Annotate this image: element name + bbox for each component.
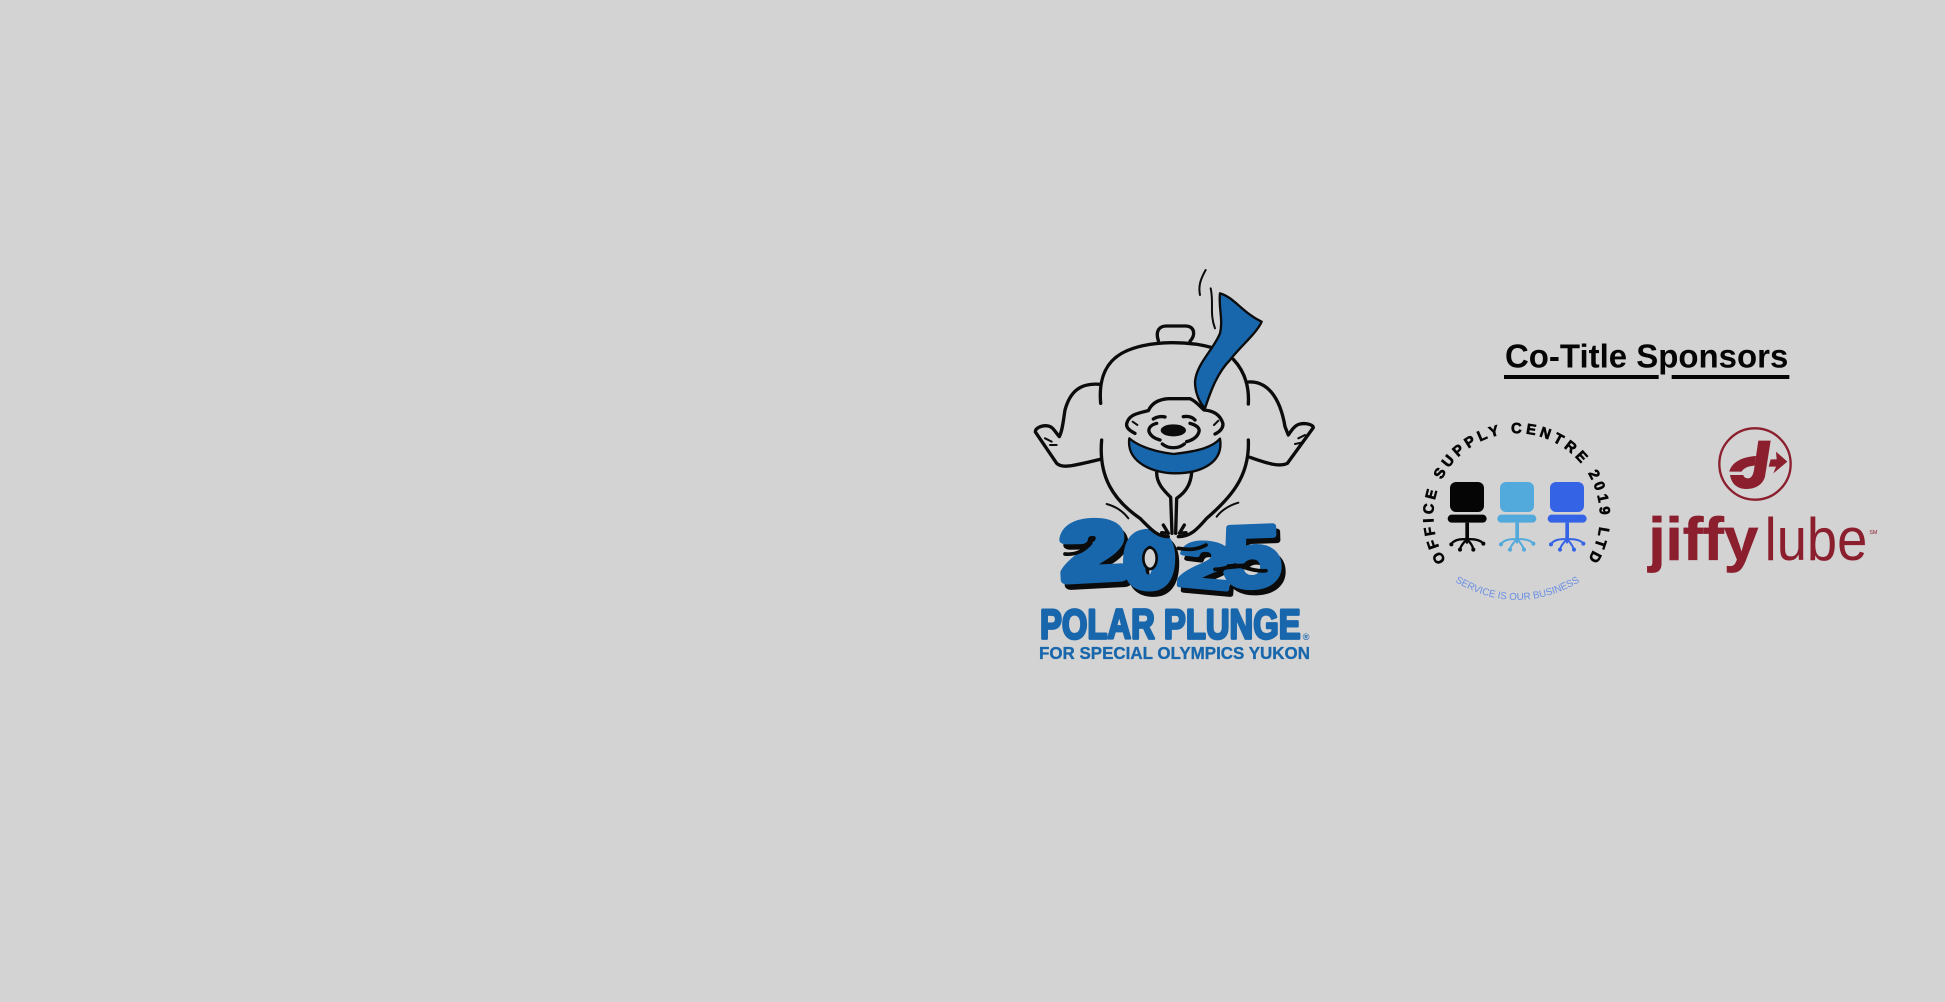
year: 2025: 2 (1060, 505, 1126, 597)
icon: blue scarf around neck (1129, 438, 1220, 473)
year: 2025: 5 (1225, 513, 1286, 612)
bear head (1127, 399, 1223, 434)
heading: Co-Title Sponsors: Co-Title Sponsors (1505, 338, 1788, 375)
icon: royal blue chair (1548, 482, 1587, 552)
logo: Office Supply Centre (1422, 422, 1610, 600)
wordmark: Polar Plunge: POLAR PLUNGE (1040, 602, 1301, 648)
year: 2025: 2 (1179, 533, 1239, 609)
year: 2025: 0 (1122, 518, 1176, 604)
year: 2025: 0 (1126, 523, 1180, 610)
year: 2025 (1060, 505, 1286, 612)
service mark: SM (1869, 530, 1877, 536)
year: 2025: 2 (1064, 510, 1130, 603)
wordmark: lube: lube (1765, 505, 1867, 573)
icon: blue scarf tail (1195, 293, 1262, 408)
year: 2025: 5 (1221, 508, 1282, 606)
sponsors block (1422, 338, 1877, 600)
logo: Jiffy Lube (1647, 428, 1877, 573)
icon: diving polar bear (1035, 270, 1313, 537)
curved name text: OFFICE SUPPLY CENTRE 2019 LTD (1422, 422, 1610, 564)
wordmark: Polar Plunge: ® (1303, 632, 1310, 642)
icon: light blue chair (1497, 482, 1536, 552)
tagline: for Special Olympics Yukon: FOR SPECIAL OLYMPICS YUKON (1039, 643, 1310, 663)
icon: Jiffy Lube roundel (1719, 428, 1791, 500)
wordmark: jiffy: jiffy (1647, 505, 1759, 573)
curved slogan text: SERVICE IS OUR BUSINESS (1456, 576, 1579, 600)
icon: black chair (1448, 482, 1487, 552)
year: 2025: 2 (1175, 528, 1235, 604)
logo: 2025 Polar Plunge (1035, 270, 1313, 663)
